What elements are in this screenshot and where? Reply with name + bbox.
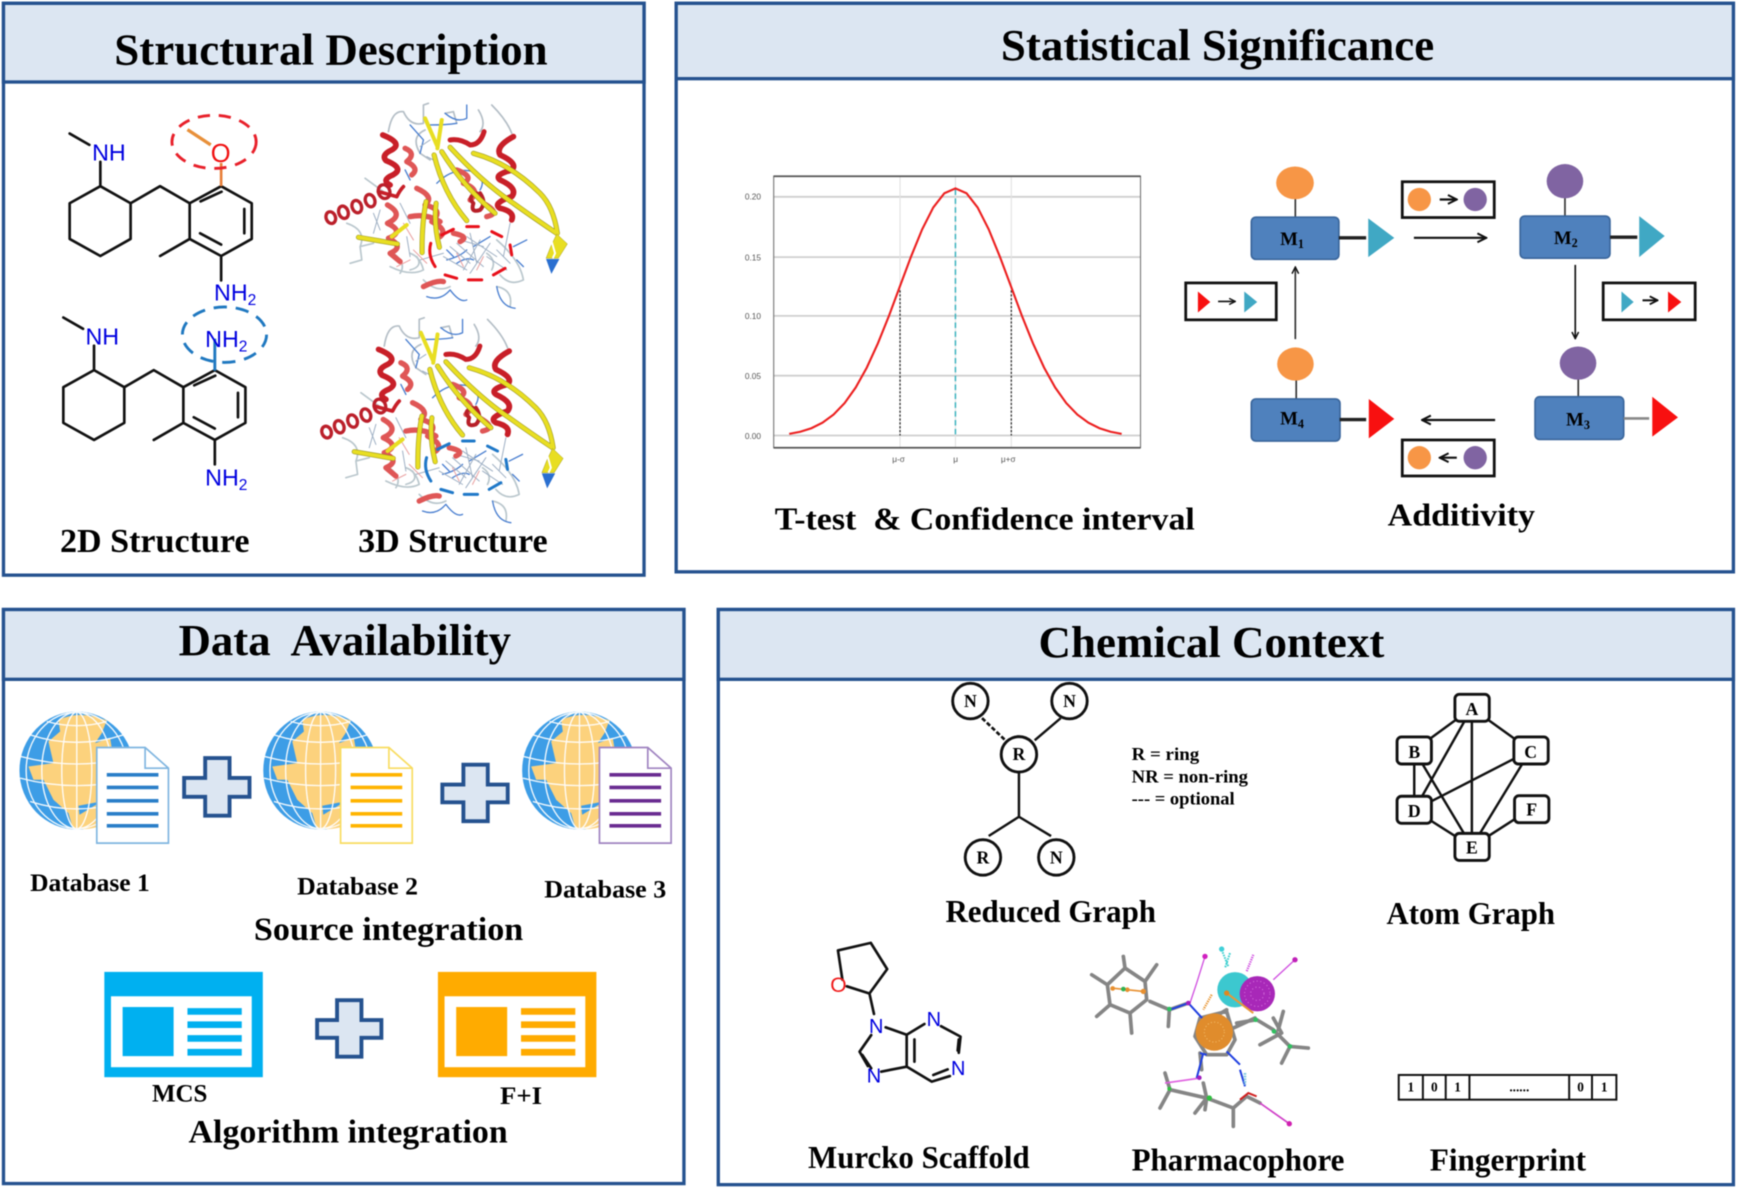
reduced graph diagram: R [977,847,990,867]
3D protein structure with blue pocket [320,318,563,523]
heading: statistical significance: Statistical Significance [1001,21,1434,70]
chart: normal distribution curve: 0.20 [745,191,761,201]
atom graph diagram: C [1524,742,1537,762]
chart: normal distribution curve: 0.15 [745,252,761,262]
label: database 2: Database 2 [297,873,418,900]
node: M4: M [1280,408,1298,429]
fingerprint bit string: 1 [1407,1080,1414,1095]
2D molecule with amine highlight [63,307,267,494]
reduced graph diagram: N [1050,847,1063,867]
label: algorithm integration: Algorithm integration [189,1114,508,1151]
node: M1: 1 [1298,237,1304,251]
reduced graph legend: --- = optional [1132,789,1235,809]
Murcko scaffold molecule: O [830,974,847,997]
atom graph diagram: F [1526,800,1537,820]
chart: normal distribution curve: μ-σ [892,454,905,464]
arrow: M1 to M2 [1414,237,1486,239]
label: atom graph: Atom Graph [1387,895,1555,931]
Murcko scaffold molecule: N [867,1066,881,1088]
reduced graph diagram [953,683,1087,875]
fingerprint bit string: 1 [1454,1080,1461,1095]
label: 2D structure: 2D Structure [60,523,250,560]
label: pharmacophore: Pharmacophore [1132,1141,1344,1177]
heading: chemical context [718,610,1733,679]
arrow: M4 to M1 [1294,267,1296,339]
2D molecule with oxygen highlight: NH [92,140,126,166]
fingerprint bit string: 0 [1577,1080,1584,1095]
node: M2: 2 [1572,236,1578,250]
label: additivity: Additivity [1388,496,1535,532]
heading: data availability [3,610,684,679]
2D molecule with amine highlight: 2 [239,477,247,494]
icon: plus [442,765,508,821]
heading: data availability: Data Availability [179,616,511,665]
node: M1 [1251,166,1394,259]
panel: structural description [3,3,644,575]
2D molecule with oxygen highlight [70,115,256,309]
arrow: M2 to M3 [1574,265,1576,339]
additivity cycle diagram [1186,164,1695,476]
icon: plus [317,1000,381,1057]
chart: normal distribution curve: μ [953,454,958,464]
chart: normal distribution curve: 0.05 [745,371,761,381]
label: 3D structure: 3D Structure [358,523,548,560]
atom graph diagram: E [1466,837,1478,857]
exchange box: purple to orange [1402,440,1494,476]
node: M2: M [1554,228,1572,249]
icon: database 3 globe and document [522,711,671,843]
reduced graph diagram: N [1063,691,1076,711]
label: reduced graph: Reduced Graph [945,893,1156,929]
Murcko scaffold molecule: N [951,1058,965,1080]
label: database 1: Database 1 [30,870,150,897]
Murcko scaffold molecule: N [869,1016,883,1038]
chart: normal distribution curve [745,176,1141,464]
exchange box: blue to red [1603,283,1695,320]
reduced graph diagram: N [964,691,977,711]
node: M3: M [1566,410,1584,431]
heading: structural description [3,3,644,82]
Murcko scaffold molecule: N [927,1009,941,1031]
panel: statistical significance [676,3,1733,572]
3D protein structure with red pocket [324,103,567,308]
atom graph diagram: D [1408,801,1421,821]
chart: normal distribution curve: 0.00 [745,431,761,441]
label: database 3: Database 3 [544,877,666,904]
label: t-test and confidence interval: T-test & Confidence interval [775,501,1195,537]
node: M3 [1535,347,1678,439]
node: M2 [1520,164,1665,258]
node: M3: 3 [1584,418,1590,432]
2D molecule with amine highlight: NH [85,324,119,350]
node: M4 [1251,347,1394,441]
chart: normal distribution curve: 0.10 [745,311,761,321]
label: source integration: Source integration [254,911,523,948]
fingerprint bit string: 0 [1431,1080,1438,1095]
2D molecule with amine highlight: NH [205,326,239,352]
panel: data availability [3,610,684,1184]
heading: statistical significance [676,3,1733,79]
2D molecule with oxygen highlight: O [211,140,231,168]
label: Murcko scaffold: Murcko Scaffold [808,1139,1030,1175]
node: M1: M [1280,229,1298,250]
icon: database 2 globe and document [263,711,412,843]
reduced graph legend: R = ring [1132,744,1199,764]
atom graph diagram [1397,694,1549,860]
atom graph diagram: A [1465,699,1478,719]
Murcko scaffold molecule [830,943,965,1088]
icon: MCS algorithm window [104,972,263,1077]
node: M4: 4 [1298,417,1304,431]
atom graph diagram: B [1408,742,1420,762]
icon: plus [184,758,250,816]
label: F+I: F+I [500,1083,542,1110]
2D molecule with oxygen highlight: NH [214,279,248,305]
fingerprint bit string [1399,1075,1616,1100]
heading: structural description: Structural Description [114,25,548,74]
fingerprint bit string: 1 [1601,1080,1608,1095]
2D molecule with oxygen highlight: 2 [248,292,256,309]
fingerprint bit string: ...... [1509,1080,1529,1095]
chart: normal distribution curve: μ+σ [1001,454,1016,464]
panel: chemical context [718,610,1733,1185]
heading: chemical context: Chemical Context [1039,618,1385,667]
2D molecule with amine highlight: NH [205,464,239,490]
reduced graph legend: NR = non-ring [1132,766,1248,786]
reduced graph legend [1132,744,1248,809]
arrow: M3 to M4 [1422,419,1495,421]
exchange box: orange to purple [1402,182,1494,218]
reduced graph diagram: R [1013,744,1026,764]
exchange box: red to blue [1186,283,1276,320]
label: MCS: MCS [152,1081,207,1108]
icon: database 1 globe and document [19,711,168,843]
pharmacophore model [1092,946,1308,1126]
2D molecule with amine highlight: 2 [239,338,247,355]
label: fingerprint: Fingerprint [1430,1141,1586,1177]
icon: F+I algorithm window [438,972,596,1077]
